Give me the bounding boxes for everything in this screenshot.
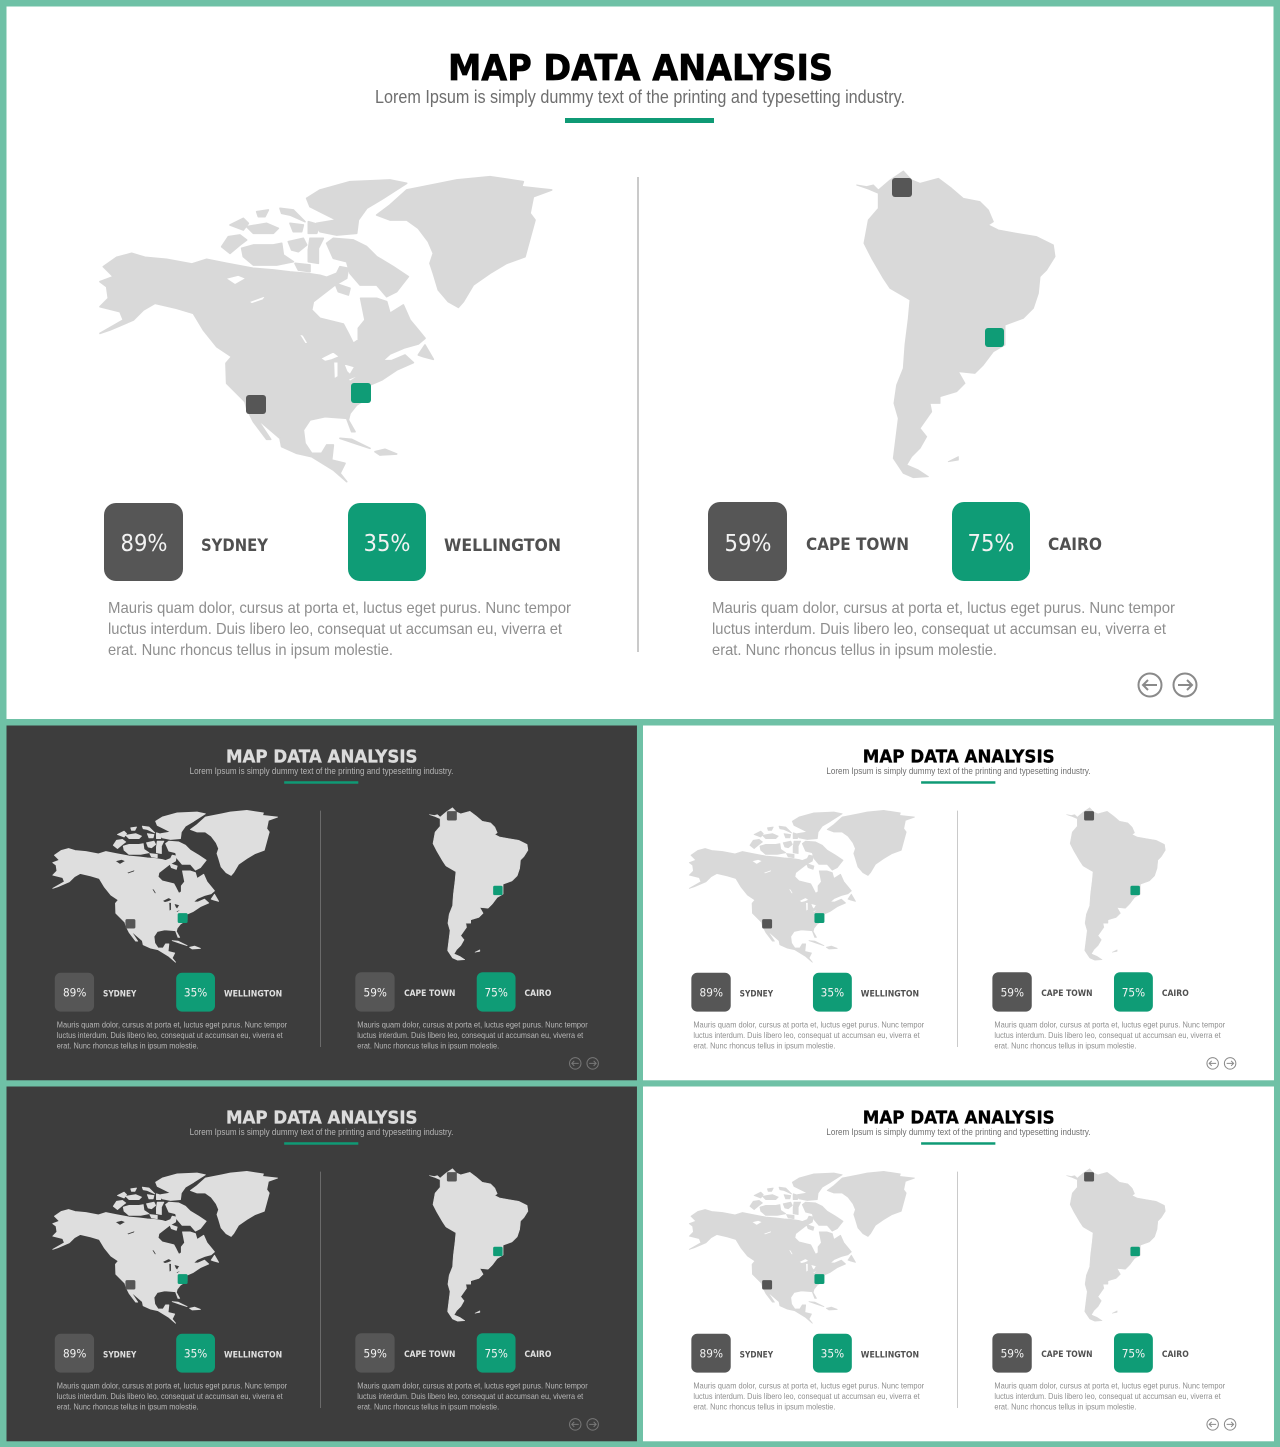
stat: Wellington: 35% xyxy=(821,1347,844,1361)
body text right xyxy=(994,1382,1225,1411)
stat: Wellington xyxy=(176,973,282,1012)
body text right: luctus interdum. Duis libero leo, consequat ut accumsan eu, viverra et xyxy=(994,1392,1221,1401)
stat: Sydney xyxy=(55,1334,137,1373)
subtitle: Lorem Ipsum is simply dummy text of the printing and typesetting industry. xyxy=(190,766,453,776)
stat: Sydney: SYDNEY xyxy=(201,536,269,556)
stat: Cairo xyxy=(1114,972,1189,1012)
stat: Cairo: CAIRO xyxy=(525,1349,551,1359)
panel: small dark slide, bottom left xyxy=(6,1087,637,1441)
subtitle: Lorem Ipsum is simply dummy text of the printing and typesetting industry. xyxy=(375,87,905,107)
body text right: luctus interdum. Duis libero leo, consequat ut accumsan eu, viverra et xyxy=(357,1031,584,1040)
body text left xyxy=(57,1021,287,1050)
body text right: Mauris quam dolor, cursus at porta et, luctus eget purus. Nunc tempor xyxy=(357,1382,588,1391)
marker: grey South America xyxy=(447,811,457,821)
body text left xyxy=(108,600,572,659)
body text right: luctus interdum. Duis libero leo, consequat ut accumsan eu, viverra et xyxy=(357,1392,584,1401)
stat: Wellington: 35% xyxy=(364,531,410,557)
stat: Cairo xyxy=(477,1333,551,1373)
stat: Wellington xyxy=(813,1334,919,1373)
body text left: luctus interdum. Duis libero leo, consequat ut accumsan eu, viverra et xyxy=(108,621,563,638)
title underline xyxy=(565,118,714,123)
body text left: Mauris quam dolor, cursus at porta et, luctus eget purus. Nunc tempor xyxy=(57,1021,287,1030)
map: North America xyxy=(100,177,552,482)
marker: green South America xyxy=(1130,1247,1140,1256)
body text left: Mauris quam dolor, cursus at porta et, luctus eget purus. Nunc tempor xyxy=(693,1021,924,1030)
stat: Cape Town: 59% xyxy=(1001,1347,1024,1361)
stat: Sydney: 89% xyxy=(63,1347,86,1361)
panel: large white slide xyxy=(6,6,1274,719)
subtitle: Lorem Ipsum is simply dummy text of the printing and typesetting industry. xyxy=(826,1127,1091,1137)
body text left: luctus interdum. Duis libero leo, consequat ut accumsan eu, viverra et xyxy=(693,1031,920,1040)
body text left: Mauris quam dolor, cursus at porta et, luctus eget purus. Nunc tempor xyxy=(57,1382,287,1391)
map: South America xyxy=(429,1169,528,1321)
stat: Cairo: 75% xyxy=(1122,1347,1145,1361)
marker: grey North America xyxy=(246,395,266,414)
body text left: Mauris quam dolor, cursus at porta et, luctus eget purus. Nunc tempor xyxy=(108,600,572,617)
stat: Cape Town: CAPE TOWN xyxy=(404,988,455,998)
marker: green North America xyxy=(178,913,188,923)
map: South America xyxy=(1066,1169,1165,1321)
body text left: erat. Nunc rhoncus tellus in ipsum molestie. xyxy=(693,1041,835,1050)
stat: Cairo: CAIRO xyxy=(525,988,551,998)
title: MAP DATA ANALYSIS xyxy=(448,48,833,89)
marker: grey North America xyxy=(762,1280,772,1290)
nav arrows xyxy=(1207,1419,1236,1430)
title underline xyxy=(921,1142,995,1145)
body text left: erat. Nunc rhoncus tellus in ipsum molestie. xyxy=(108,642,393,659)
map: South America xyxy=(429,808,528,960)
map: North America xyxy=(53,810,278,962)
marker: grey South America xyxy=(892,178,912,197)
marker: grey South America xyxy=(447,1172,457,1182)
panel: small white slide, top right xyxy=(643,726,1274,1080)
stat: Cape Town: 59% xyxy=(1001,986,1024,1000)
centre divider xyxy=(319,1172,321,1408)
map: North America xyxy=(689,1171,914,1323)
panel: small dark slide, top left xyxy=(6,726,637,1080)
body text left: Mauris quam dolor, cursus at porta et, luctus eget purus. Nunc tempor xyxy=(693,1382,924,1391)
stat: Sydney xyxy=(55,973,137,1012)
map: South America xyxy=(1066,808,1165,960)
stat: Wellington: WELLINGTON xyxy=(224,989,282,999)
body text left: erat. Nunc rhoncus tellus in ipsum molestie. xyxy=(693,1402,835,1411)
body text right: Mauris quam dolor, cursus at porta et, luctus eget purus. Nunc tempor xyxy=(994,1382,1225,1391)
body text right xyxy=(712,600,1176,659)
marker: grey South America xyxy=(1084,811,1094,821)
stat: Cairo: 75% xyxy=(968,531,1014,557)
nav arrows xyxy=(570,1419,598,1430)
marker: grey North America xyxy=(125,919,135,929)
marker: green North America xyxy=(178,1274,188,1284)
stat: Sydney xyxy=(691,1334,774,1373)
centre divider xyxy=(956,811,958,1047)
body text left: erat. Nunc rhoncus tellus in ipsum molestie. xyxy=(57,1402,199,1411)
body text right xyxy=(994,1021,1225,1050)
stat: Cape Town xyxy=(355,972,455,1012)
title: MAP DATA ANALYSIS xyxy=(226,1107,418,1128)
panel: small white slide, bottom right xyxy=(643,1087,1274,1441)
nav arrows xyxy=(1138,674,1196,696)
stat: Cairo xyxy=(477,972,551,1012)
stat: Sydney: SYDNEY xyxy=(103,989,137,999)
stat: Cape Town xyxy=(992,972,1093,1012)
marker: grey South America xyxy=(1084,1172,1094,1182)
body text right xyxy=(357,1021,588,1050)
title: MAP DATA ANALYSIS xyxy=(863,1107,1055,1128)
subtitle: Lorem Ipsum is simply dummy text of the printing and typesetting industry. xyxy=(826,766,1091,776)
stat: Sydney: SYDNEY xyxy=(740,1350,774,1360)
stat: Cairo: CAIRO xyxy=(1162,988,1189,998)
marker: grey North America xyxy=(125,1280,135,1290)
stat: Wellington: WELLINGTON xyxy=(861,989,919,999)
stat: Sydney xyxy=(104,503,269,581)
body text left xyxy=(57,1382,287,1411)
centre divider xyxy=(319,811,321,1047)
stat: Sydney: SYDNEY xyxy=(740,989,774,999)
body text left xyxy=(693,1382,924,1411)
stat: Wellington: 35% xyxy=(821,986,844,1000)
body text right: erat. Nunc rhoncus tellus in ipsum molestie. xyxy=(712,642,997,659)
title underline xyxy=(284,781,358,784)
stat: Sydney: 89% xyxy=(63,986,86,1000)
stat: Cairo: CAIRO xyxy=(1048,535,1102,555)
marker: grey North America xyxy=(762,919,772,929)
stat: Cape Town xyxy=(708,502,909,581)
body text right: Mauris quam dolor, cursus at porta et, luctus eget purus. Nunc tempor xyxy=(357,1021,588,1030)
body text left: luctus interdum. Duis libero leo, consequat ut accumsan eu, viverra et xyxy=(57,1031,283,1040)
stat: Wellington xyxy=(813,973,919,1012)
marker: green South America xyxy=(1130,886,1140,895)
body text right: erat. Nunc rhoncus tellus in ipsum molestie. xyxy=(357,1402,499,1411)
body text right xyxy=(357,1382,588,1411)
stat: Cairo: CAIRO xyxy=(1162,1349,1189,1359)
title underline xyxy=(921,781,995,784)
body text right: Mauris quam dolor, cursus at porta et, luctus eget purus. Nunc tempor xyxy=(994,1021,1225,1030)
stat: Cape Town xyxy=(992,1333,1093,1373)
stat: Cape Town: CAPE TOWN xyxy=(404,1349,455,1359)
map: North America xyxy=(689,810,914,962)
stat: Wellington xyxy=(176,1334,282,1373)
stat: Sydney: 89% xyxy=(700,1347,723,1361)
stat: Cape Town xyxy=(355,1333,455,1373)
subtitle: Lorem Ipsum is simply dummy text of the printing and typesetting industry. xyxy=(190,1127,453,1137)
body text left: luctus interdum. Duis libero leo, consequat ut accumsan eu, viverra et xyxy=(693,1392,920,1401)
title: MAP DATA ANALYSIS xyxy=(863,746,1055,767)
centre divider xyxy=(956,1172,958,1408)
centre divider xyxy=(637,177,639,652)
stat: Wellington: WELLINGTON xyxy=(444,536,561,556)
stat: Cairo xyxy=(952,502,1102,581)
stat: Sydney xyxy=(691,973,774,1012)
body text right: erat. Nunc rhoncus tellus in ipsum molestie. xyxy=(357,1041,499,1050)
stat: Cape Town: 59% xyxy=(364,1347,387,1361)
marker: green South America xyxy=(985,328,1004,347)
title: MAP DATA ANALYSIS xyxy=(226,746,418,767)
body text right: luctus interdum. Duis libero leo, consequat ut accumsan eu, viverra et xyxy=(712,621,1167,638)
stat: Cape Town: 59% xyxy=(724,531,772,557)
marker: green South America xyxy=(493,886,503,895)
body text left: erat. Nunc rhoncus tellus in ipsum molestie. xyxy=(57,1041,199,1050)
map: South America xyxy=(857,171,1055,478)
stat: Cairo: 75% xyxy=(1122,986,1145,1000)
stat: Wellington xyxy=(348,503,561,581)
stat: Wellington: 35% xyxy=(184,1347,207,1361)
stat: Cape Town: CAPE TOWN xyxy=(1041,988,1093,998)
stat: Sydney: SYDNEY xyxy=(103,1350,137,1360)
stat: Wellington: WELLINGTON xyxy=(861,1350,919,1360)
marker: green North America xyxy=(351,383,371,403)
nav arrows xyxy=(1207,1058,1236,1069)
body text left: luctus interdum. Duis libero leo, consequat ut accumsan eu, viverra et xyxy=(57,1392,283,1401)
stat: Cape Town: 59% xyxy=(364,986,387,1000)
stat: Cairo: 75% xyxy=(484,986,508,1000)
stat: Sydney: 89% xyxy=(120,531,168,557)
title underline xyxy=(284,1142,358,1145)
nav arrows xyxy=(570,1058,598,1069)
body text right: Mauris quam dolor, cursus at porta et, luctus eget purus. Nunc tempor xyxy=(712,600,1176,617)
stat: Sydney: 89% xyxy=(700,986,723,1000)
stat: Wellington: WELLINGTON xyxy=(224,1350,282,1360)
marker: green North America xyxy=(814,913,824,923)
body text left xyxy=(693,1021,924,1050)
stat: Wellington: 35% xyxy=(184,986,207,1000)
stat: Cape Town: CAPE TOWN xyxy=(1041,1349,1093,1359)
body text right: erat. Nunc rhoncus tellus in ipsum molestie. xyxy=(994,1041,1136,1050)
stat: Cairo: 75% xyxy=(484,1347,508,1361)
map: North America xyxy=(53,1171,278,1323)
body text right: luctus interdum. Duis libero leo, consequat ut accumsan eu, viverra et xyxy=(994,1031,1221,1040)
stat: Cairo xyxy=(1114,1333,1189,1373)
marker: green North America xyxy=(814,1274,824,1284)
marker: green South America xyxy=(493,1247,503,1256)
body text right: erat. Nunc rhoncus tellus in ipsum molestie. xyxy=(994,1402,1136,1411)
stat: Cape Town: CAPE TOWN xyxy=(806,535,909,555)
